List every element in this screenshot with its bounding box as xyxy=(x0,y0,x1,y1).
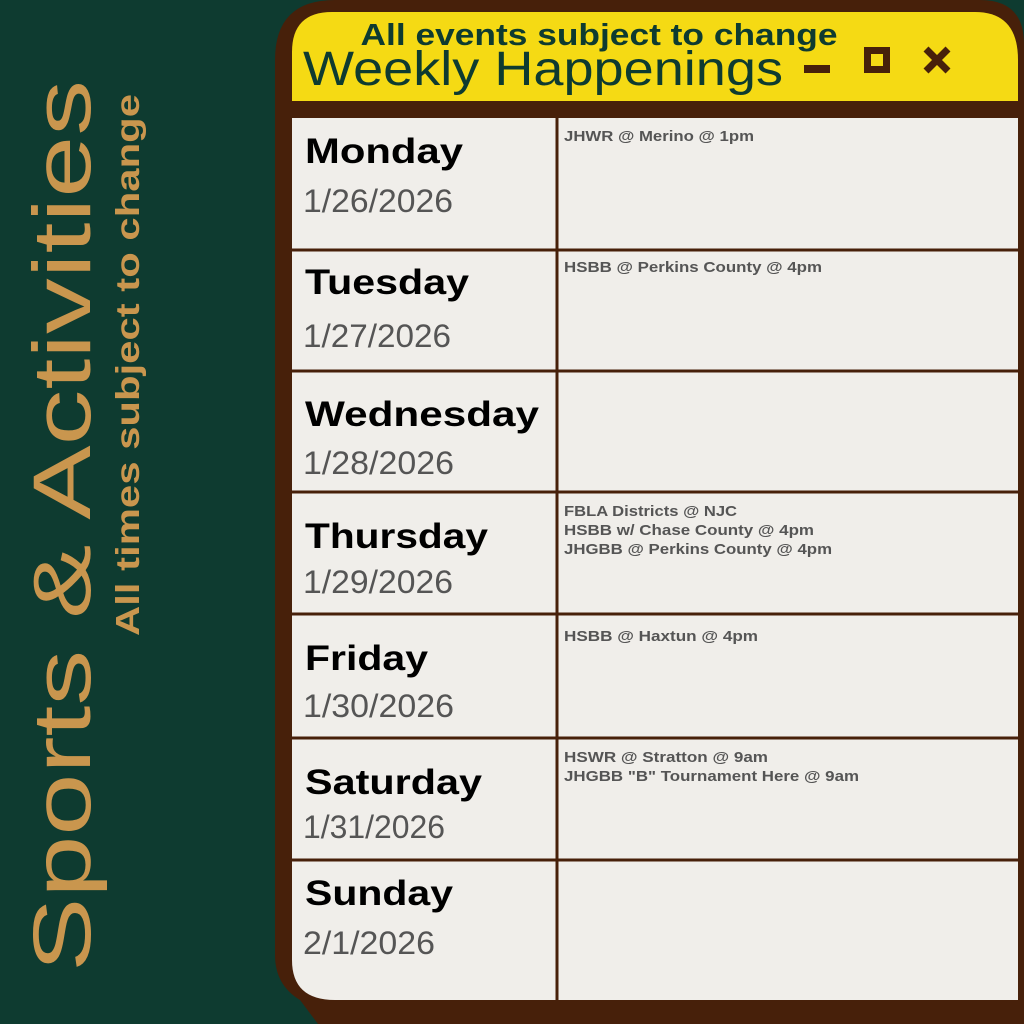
row: Monday xyxy=(303,128,754,219)
row: Tuesday: 1/27/2026 xyxy=(303,318,451,354)
row: Monday: 1/26/2026 xyxy=(303,183,453,219)
row: Monday: JHWR @ Merino @ 1pm xyxy=(564,128,754,145)
row: Wednesday xyxy=(303,395,540,481)
row: Saturday: HSWR @ Stratton @ 9am xyxy=(564,749,768,766)
row: Sunday xyxy=(303,874,454,961)
row: Thursday: HSBB w/ Chase County @ 4pm xyxy=(564,522,814,539)
row: Thursday: 1/29/2026 xyxy=(303,564,453,600)
row: Wednesday: 1/28/2026 xyxy=(303,445,454,481)
row: Sunday: Sunday xyxy=(305,874,454,913)
header bar xyxy=(292,12,1018,101)
schedule table xyxy=(292,118,1018,1000)
row: Saturday: Saturday xyxy=(305,763,483,802)
row: Saturday: JHGBB "B" Tournament Here @ 9am xyxy=(564,768,859,785)
row: Saturday: 1/31/2026 xyxy=(303,809,445,845)
row: Thursday: FBLA Districts @ NJC xyxy=(564,503,737,520)
row: Wednesday: Wednesday xyxy=(305,395,540,434)
icon: minimize xyxy=(804,65,830,73)
header title: Weekly Happenings xyxy=(303,43,783,96)
icon: maximize xyxy=(868,50,886,70)
row: Friday: HSBB @ Haxtun @ 4pm xyxy=(564,628,758,645)
row: Thursday xyxy=(303,503,832,600)
row: Saturday xyxy=(303,749,859,845)
row: Friday: 1/30/2026 xyxy=(303,688,454,724)
window frame xyxy=(275,0,1024,1024)
row: Thursday: Thursday xyxy=(305,517,489,556)
side subtitle: All times subject to change xyxy=(109,94,146,636)
row: Tuesday: Tuesday xyxy=(305,263,470,302)
row: Tuesday: HSBB @ Perkins County @ 4pm xyxy=(564,259,822,276)
row: Friday: Friday xyxy=(305,639,429,678)
icon: close xyxy=(926,49,948,71)
row: Tuesday xyxy=(303,259,822,354)
row: Sunday: 2/1/2026 xyxy=(303,925,435,961)
row: Thursday: JHGBB @ Perkins County @ 4pm xyxy=(564,541,832,558)
row: Monday: Monday xyxy=(305,132,464,171)
side title: Sports & Activities: Sports & Activities xyxy=(17,80,108,972)
header subtitle: All events subject to change xyxy=(360,17,838,52)
row: Friday xyxy=(303,628,758,724)
